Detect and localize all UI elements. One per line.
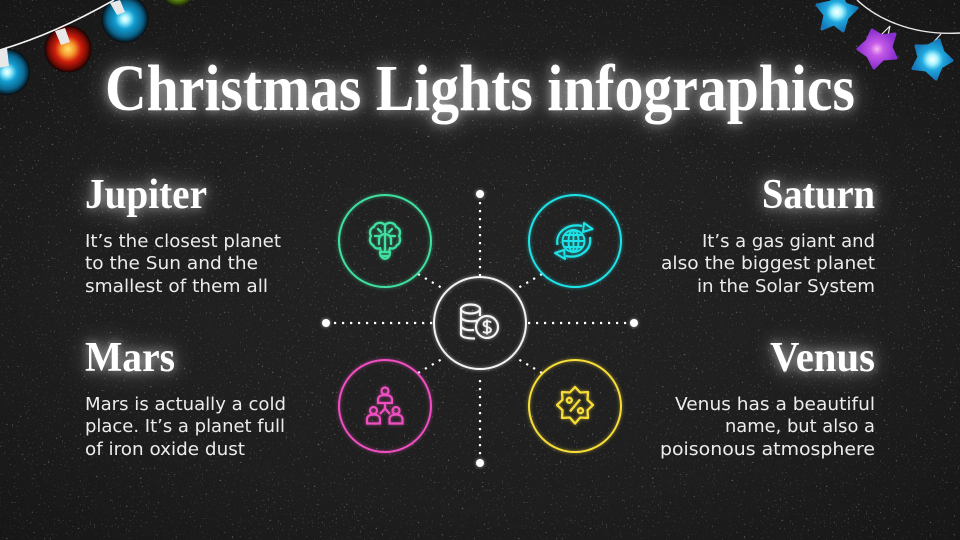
text: Saturn description: It’s a gas giant and — [702, 232, 875, 252]
icon: brain bulb — [370, 223, 400, 259]
panel: Saturn — [661, 172, 875, 297]
panel: Mars — [85, 335, 286, 460]
text: Saturn description: also the biggest planet — [661, 254, 875, 274]
text: Venus description — [660, 395, 875, 460]
text: Mars description: Mars is actually a cold — [85, 395, 286, 415]
text: Jupiter description: smallest of them all — [85, 277, 268, 297]
star: purple — [858, 30, 896, 68]
bulb: blue left — [0, 49, 30, 95]
text: Jupiter description — [85, 232, 281, 297]
heading: Saturn: Saturn — [762, 172, 875, 218]
node: green brain — [339, 195, 431, 287]
icon: coins and dollar — [461, 304, 498, 338]
panel: Jupiter — [85, 172, 281, 297]
star: blue right — [913, 40, 952, 79]
text: Venus description: name, but also a — [725, 417, 875, 437]
text: Jupiter description: to the Sun and the — [85, 254, 258, 274]
heading: Venus: Venus — [770, 335, 875, 381]
text: Mars description: place. It’s a planet full — [85, 417, 285, 437]
icon: percent badge — [557, 387, 593, 424]
node: yellow discount — [529, 360, 621, 452]
node: cyan globe — [529, 195, 621, 287]
string lights: top right — [817, 0, 960, 79]
icon: rotating globe — [555, 223, 592, 259]
heading: Mars: Mars — [85, 335, 175, 381]
title: Christmas Lights infographics — [105, 52, 855, 125]
bulb: blue right — [102, 0, 148, 42]
string lights: top left — [0, 0, 195, 95]
text: Venus description: Venus has a beautiful — [675, 395, 875, 415]
bulb: green — [161, 0, 195, 6]
text: Mars description: of iron oxide dust — [85, 440, 245, 460]
text: Saturn description — [661, 232, 875, 297]
star: blue top — [817, 0, 857, 31]
node: centre coins — [434, 277, 526, 369]
bulb: red — [44, 26, 92, 72]
text: Venus description: poisonous atmosphere — [660, 440, 875, 460]
icon: team hierarchy — [367, 388, 402, 424]
text: Mars description — [85, 395, 286, 460]
text: Jupiter description: It’s the closest planet — [85, 232, 281, 252]
diagram: dotted connectors — [322, 190, 638, 467]
node: pink people — [339, 360, 431, 452]
panel: Venus — [660, 335, 875, 460]
heading: Jupiter: Jupiter — [85, 172, 207, 218]
text: Saturn description: in the Solar System — [697, 277, 875, 297]
